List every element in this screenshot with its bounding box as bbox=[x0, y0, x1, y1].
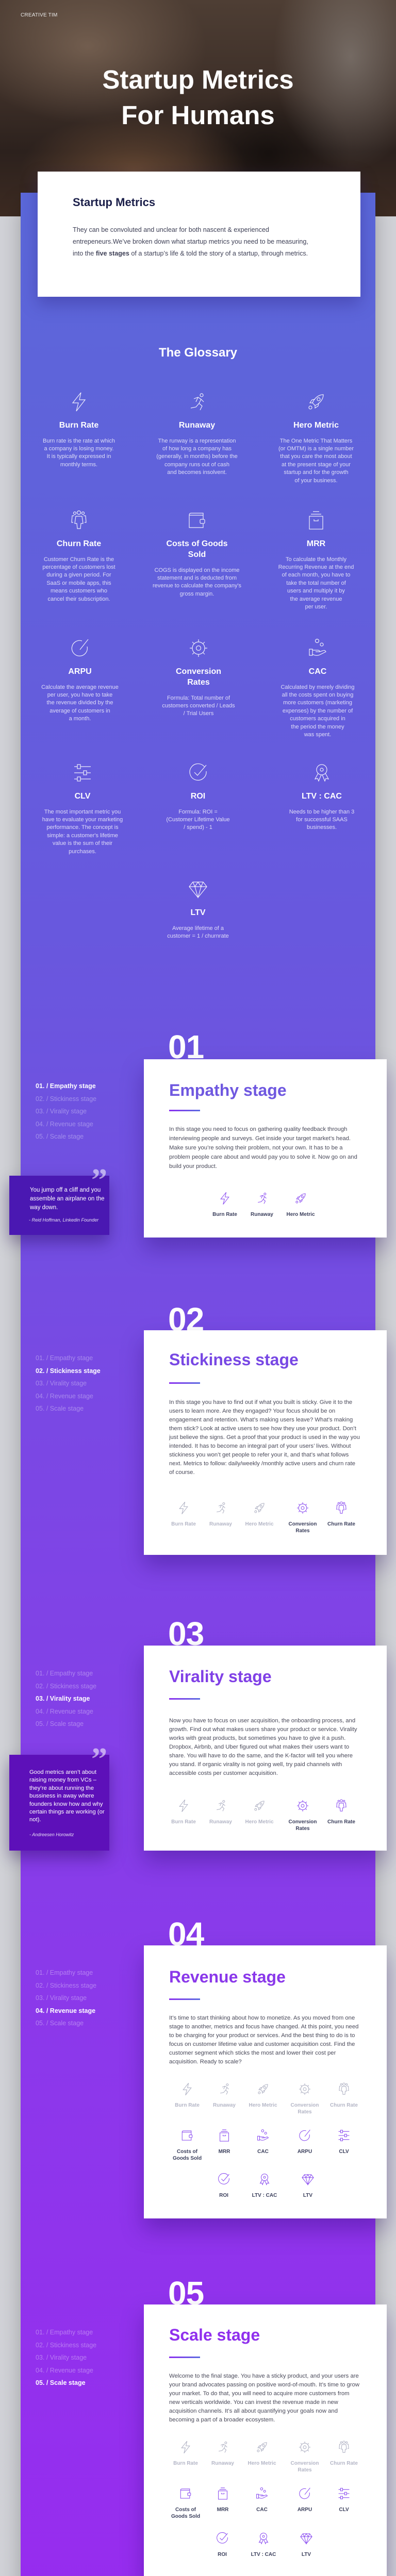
icon: runaway: Runaway bbox=[209, 1819, 232, 1825]
glossary: arpu: ARPU bbox=[68, 667, 92, 676]
nav list stage 4: 03. / Virality stage bbox=[36, 1994, 87, 2002]
glossary: ltv cac: Needs to be higher than 3 bbox=[289, 809, 354, 815]
icon: clv bbox=[323, 2487, 365, 2513]
icon: conversion rates: Conversion bbox=[288, 1521, 317, 1527]
glossary: clv: purchases. bbox=[69, 849, 96, 855]
nav list stage 2: 04. / Revenue stage bbox=[36, 1393, 93, 1400]
nav list stage 4 bbox=[36, 1969, 96, 2027]
card: empathy stage: In this stage you need to focus on gathering quality feedback through interviewing people and surveys. Get inside your target market’s head. Make sure you’re solving their problem, not your own. It has to be a problem people care about and would pay you to solve it. Now go on and build your product. bbox=[169, 1126, 357, 1170]
nav list stage 3: 01. / Empathy stage bbox=[36, 1670, 93, 1677]
glossary: cac bbox=[280, 639, 355, 738]
glossary: cogs: Sold bbox=[188, 550, 206, 558]
quote 2: Good metrics aren’t about raising money from VCs – they’re about running the bussiness in away where founders know how and why certain things are working (or not). bbox=[29, 1769, 105, 1823]
nav list stage 1: 02. / Stickiness stage bbox=[36, 1095, 96, 1103]
icon: cogs bbox=[165, 2487, 206, 2519]
nav list stage 1: 03. / Virality stage bbox=[36, 1108, 87, 1115]
card: empathy stage bbox=[144, 1059, 387, 1238]
icon: conversion rates bbox=[290, 2083, 319, 2114]
icon: roi bbox=[202, 2532, 243, 2557]
glossary: clv: performance. The concept is bbox=[46, 824, 119, 831]
glossary: mrr: MRR bbox=[307, 539, 325, 548]
glossary: ltv cac: LTV : CAC bbox=[302, 791, 342, 801]
icon: cac bbox=[257, 2129, 269, 2155]
glossary: churn rate: during a given period. For bbox=[46, 572, 111, 578]
quote 2 bbox=[9, 1755, 109, 1851]
glossary: ltv cac: businesses. bbox=[307, 824, 337, 831]
icon: conversion rates: Conversion bbox=[290, 2102, 319, 2108]
glossary: roi: (Customer Lifetime Value bbox=[166, 817, 230, 823]
icon: runaway bbox=[251, 1193, 273, 1217]
icon: cac: CAC bbox=[256, 2507, 268, 2512]
nav list stage 3: 05. / Scale stage bbox=[36, 1720, 84, 1727]
icon: churn rate: Churn Rate bbox=[330, 2461, 358, 2466]
glossary: roi: / spend) - 1 bbox=[184, 824, 212, 831]
card: revenue stage: Revenue stage bbox=[169, 1968, 286, 1986]
glossary: churn rate: Customer Churn Rate is the bbox=[44, 556, 114, 563]
stage number 01: 01 bbox=[168, 1028, 204, 1065]
icon: ltv bbox=[287, 2173, 328, 2199]
icon: clv: CLV bbox=[339, 2507, 349, 2512]
glossary: burn rate: a company is losing money. bbox=[44, 446, 113, 452]
glossary: cogs: Costs of Goods bbox=[166, 539, 228, 548]
hero title: Startup Metrics bbox=[102, 65, 294, 94]
glossary: mrr: To calculate the Monthly bbox=[286, 556, 346, 563]
nav list stage 3: 02. / Stickiness stage bbox=[36, 1683, 96, 1690]
glossary: arpu bbox=[41, 639, 119, 722]
intro card bbox=[38, 172, 360, 297]
icon: burn rate bbox=[165, 2441, 206, 2467]
stage number 02: 02 bbox=[168, 1301, 204, 1338]
glossary: churn rate: Churn Rate bbox=[57, 539, 101, 548]
nav list stage 4: 01. / Empathy stage bbox=[36, 1969, 93, 1976]
icon: roi bbox=[203, 2173, 244, 2199]
glossary: cac: the period the money bbox=[291, 724, 344, 730]
nav list stage 5: 05. / Scale stage bbox=[36, 2379, 86, 2386]
nav list stage 3 bbox=[36, 1670, 96, 1727]
nav list stage 2: 01. / Empathy stage bbox=[36, 1354, 93, 1362]
hero background photo bbox=[0, 0, 396, 216]
glossary: burn rate: It is typically expressed in bbox=[47, 453, 111, 460]
glossary: clv: CLV bbox=[75, 791, 90, 801]
nav list stage 5: 02. / Stickiness stage bbox=[36, 2342, 96, 2349]
icon: hero metric bbox=[241, 2441, 283, 2467]
icon: conversion rates: Conversion bbox=[288, 1819, 317, 1825]
icon: churn rate bbox=[327, 1501, 355, 1527]
nav list stage 1: 01. / Empathy stage bbox=[36, 1082, 96, 1090]
quote 1: You jump off a cliff and you assemble an airplane on the way down. bbox=[30, 1187, 104, 1211]
icon: conversion rates bbox=[288, 1502, 317, 1533]
glossary: ltv: LTV bbox=[190, 908, 206, 917]
card: scale stage: Scale stage bbox=[169, 2326, 260, 2344]
glossary: clv: The most important metric you bbox=[44, 809, 121, 815]
nav list stage 4: 02. / Stickiness stage bbox=[36, 1982, 96, 1989]
glossary: cogs: statement and is deducted from bbox=[157, 575, 237, 581]
card: empathy stage: Empathy stage bbox=[169, 1081, 287, 1099]
glossary: arpu: a month. bbox=[69, 716, 91, 722]
icon: hero metric bbox=[286, 1193, 315, 1217]
icon: hero metric: Hero Metric bbox=[286, 1212, 315, 1217]
glossary: hero metric: that you care the most about bbox=[280, 453, 352, 460]
icon: runaway: Runaway bbox=[211, 2461, 234, 2466]
card: revenue stage bbox=[144, 1945, 387, 2218]
icon: hero metric: Hero Metric bbox=[248, 2461, 276, 2466]
card: stickiness stage: In this stage you have to find out if what you built is sticky. Give it to the users to learn more. Are they engaged? Your focus should be on engagement and retention. What’s making users leave? What’s making them stick? Look at active users to see how they use your product. Don’t just believe the signs. Get a proof that your product is used in the way you intended. It has to become an integral part of your users’ lives. Without stickiness you won’t get people to refer your it, and that’s what follows next. Metrics to follow: daily/weekly /monthly active users and churn rate of course. bbox=[169, 1399, 360, 1476]
icon: burn rate bbox=[175, 2083, 200, 2108]
glossary: churn rate: percentage of customers lost bbox=[42, 564, 116, 570]
icon: burn rate: Burn Rate bbox=[173, 2461, 198, 2466]
quote 1: - Reid Hoffman, Linkedin Founder bbox=[29, 1217, 98, 1223]
glossary: cac: Calculated by merely dividing bbox=[280, 684, 355, 690]
icon: runaway: Runaway bbox=[251, 1212, 273, 1217]
icon: clv: CLV bbox=[339, 2148, 349, 2155]
glossary: hero metric: startup and for the growth bbox=[284, 469, 349, 476]
icon: cogs: Costs of bbox=[175, 2507, 196, 2512]
icon: mrr bbox=[219, 2129, 230, 2155]
icon: runaway bbox=[213, 2083, 236, 2108]
icon: runaway bbox=[202, 2441, 243, 2467]
glossary: cac: customers acquired in bbox=[290, 716, 345, 722]
glossary: runaway: (generally, in months) before the bbox=[156, 453, 238, 460]
glossary: mrr: the average revenue bbox=[290, 596, 342, 602]
icon: runaway: Runaway bbox=[209, 1521, 232, 1527]
glossary: roi: ROI bbox=[191, 791, 205, 801]
glossary: mrr: users and multiply it by bbox=[287, 588, 345, 594]
icon: ltv: LTV bbox=[302, 2551, 311, 2557]
quote 1: ” bbox=[91, 1163, 107, 1198]
glossary: conversion rates: Conversion bbox=[176, 667, 221, 676]
glossary: runaway: Runaway bbox=[179, 420, 215, 430]
glossary: clv: value is the sum of their bbox=[53, 840, 112, 846]
card: scale stage: Welcome to the final stage. You have a sticky product, and your users are your brand advocates passing on positive word-of-mouth. It’s time to grow your market. To do that, you will need to acquire more customers from new verticals worldwide. You can invest the revenue made in new acquisition channels. It’s all about quantifying your goals now and becoming a part of a broader ecosystem. bbox=[169, 2373, 359, 2423]
glossary: mrr: of each month, you have to bbox=[282, 572, 350, 578]
card: stickiness stage bbox=[144, 1330, 387, 1555]
nav list stage 5: 01. / Empathy stage bbox=[36, 2329, 93, 2336]
glossary: clv: have to evaluate your marketing bbox=[42, 817, 123, 823]
glossary: runaway: company runs out of cash bbox=[164, 462, 229, 468]
icon: conversion rates bbox=[288, 1800, 317, 1831]
glossary: mrr bbox=[278, 511, 354, 610]
icon: mrr bbox=[202, 2487, 243, 2513]
glossary: runaway: of how long a company has bbox=[162, 446, 232, 452]
nav list stage 5: 03. / Virality stage bbox=[36, 2354, 87, 2361]
stage number 03: 03 bbox=[168, 1615, 204, 1652]
icon: runaway: Runaway bbox=[213, 2102, 236, 2108]
glossary: runaway bbox=[156, 393, 238, 476]
glossary: clv: simple: a customer's lifetime bbox=[47, 833, 118, 839]
icon: hero metric bbox=[245, 1503, 273, 1527]
glossary: cac: all the costs spent on buying bbox=[282, 692, 353, 698]
icon: burn rate bbox=[171, 1800, 196, 1825]
icon: burn rate: Burn Rate bbox=[212, 1212, 237, 1217]
icon: cac: CAC bbox=[257, 2148, 269, 2155]
nav list stage 2: 05. / Scale stage bbox=[36, 1405, 84, 1412]
glossary: hero metric: at the present stage of your bbox=[282, 462, 351, 468]
glossary: cogs: COGS is displayed on the income bbox=[154, 567, 240, 573]
glossary: hero metric: (or OMTM) is a single number bbox=[278, 446, 354, 452]
glossary: churn rate: cancel their subscription. bbox=[47, 596, 110, 602]
icon: mrr: MRR bbox=[217, 2507, 228, 2512]
icon: mrr: MRR bbox=[219, 2148, 230, 2155]
icon: churn rate bbox=[323, 2441, 365, 2467]
glossary: ltv: customer = 1 / churnrate bbox=[167, 933, 229, 939]
hero title: For Humans bbox=[121, 100, 275, 130]
icon: churn rate: Churn Rate bbox=[327, 1521, 355, 1527]
icon: ltv cac: LTV : CAC bbox=[252, 2193, 277, 2198]
nav list stage 5: 04. / Revenue stage bbox=[36, 2367, 93, 2374]
glossary: mrr: Recurring Revenue at the end bbox=[278, 564, 354, 570]
nav list stage 2: 02. / Stickiness stage bbox=[36, 1367, 101, 1375]
nav list stage 1: 04. / Revenue stage bbox=[36, 1121, 93, 1128]
glossary: runaway: The runway is a representation bbox=[158, 438, 236, 444]
glossary: conversion rates bbox=[162, 639, 235, 717]
icon: churn rate bbox=[327, 1799, 355, 1825]
icon: ltv cac bbox=[243, 2532, 284, 2557]
glossary: arpu: Calculate the average revenue bbox=[41, 684, 119, 690]
nav list stage 1: 05. / Scale stage bbox=[36, 1133, 84, 1140]
icon: conversion rates: Rates bbox=[295, 1528, 310, 1533]
icon: arpu bbox=[284, 2487, 325, 2513]
glossary: conversion rates: Rates bbox=[187, 678, 210, 686]
nav list stage 2: 03. / Virality stage bbox=[36, 1380, 87, 1387]
icon: cogs: Goods Sold bbox=[173, 2156, 202, 2161]
quote 2: ” bbox=[91, 1742, 107, 1777]
glossary: arpu: per user, you have to take bbox=[47, 692, 112, 698]
icon: conversion rates: Rates bbox=[295, 1826, 310, 1831]
glossary: hero metric: of your business. bbox=[294, 478, 338, 484]
card: revenue stage: It’s time to start thinking about how to monetize. As you moved from one stage to another, metrics and focus have changed. At this point, you need to be charging for your product or services. And the best thing to do is to focus on customer lifetime value and customer acquisition cost. Find the customer segment which sticks the most and lower their cost per acquisition. Ready to scale? bbox=[169, 2015, 358, 2065]
glossary: burn rate: monthly terms. bbox=[60, 462, 97, 468]
icon: hero metric: Hero Metric bbox=[245, 1819, 273, 1825]
glossary: cac: CAC bbox=[309, 667, 326, 676]
glossary: mrr: take the total number of bbox=[286, 580, 346, 586]
glossary: ltv: Average lifetime of a bbox=[172, 925, 224, 931]
icon: cac bbox=[241, 2487, 283, 2513]
glossary: cogs: gross margin. bbox=[180, 591, 214, 597]
nav list stage 1 bbox=[36, 1082, 96, 1140]
glossary: churn rate bbox=[42, 510, 116, 602]
glossary: hero metric: Hero Metric bbox=[293, 420, 339, 430]
glossary: burn rate: Burn rate is the rate at which bbox=[43, 438, 115, 444]
glossary: cac: was spent. bbox=[304, 732, 331, 738]
glossary: burn rate bbox=[43, 393, 115, 468]
icon: ltv bbox=[286, 2532, 327, 2557]
glossary: conversion rates: / Trial Users bbox=[184, 710, 213, 717]
icon: ltv cac bbox=[244, 2173, 285, 2199]
icon: arpu: ARPU bbox=[298, 2148, 312, 2155]
intro heading: Startup Metrics bbox=[73, 196, 155, 209]
icon: roi: ROI bbox=[218, 2551, 227, 2557]
glossary: cogs bbox=[153, 513, 241, 597]
hero title bbox=[102, 65, 294, 130]
quote 1 bbox=[9, 1176, 109, 1235]
icon: conversion rates bbox=[284, 2441, 325, 2473]
icon: burn rate bbox=[212, 1192, 237, 1217]
icon: burn rate: Burn Rate bbox=[175, 2102, 200, 2108]
icon: roi: ROI bbox=[219, 2193, 228, 2198]
icon: churn rate bbox=[330, 2082, 358, 2108]
icon: runaway bbox=[209, 1800, 232, 1825]
icon: ltv cac: LTV : CAC bbox=[251, 2551, 276, 2557]
card: virality stage: Now you have to focus on user acquisition, the onboarding process, and growth. Find out what makes users share your product or service. Virality works with great products, but sometimes you have to give it a push. Dropbox, Airbnb, and Uber figured out what makes their users want to share. You will have to do the same, and the K-factor will tell you where you stand. If organic virality is not going well, try paid channels with accessible costs per customer acquisition. bbox=[169, 1718, 357, 1776]
glossary: hero metric bbox=[278, 394, 354, 484]
nav list stage 3: 04. / Revenue stage bbox=[36, 1708, 93, 1715]
glossary: burn rate: Burn Rate bbox=[59, 420, 98, 430]
icon: arpu bbox=[284, 2129, 325, 2155]
icon: conversion rates: Rates bbox=[298, 2467, 312, 2473]
brand label: CREATIVE TIM bbox=[21, 12, 57, 18]
quote 2: - Andreesen Horowitz bbox=[29, 1832, 74, 1837]
icon: burn rate: Burn Rate bbox=[171, 1819, 196, 1825]
glossary: churn rate: means customers who bbox=[51, 588, 107, 594]
glossary: arpu: average of customers in bbox=[50, 708, 110, 714]
glossary: cac: expenses) by the number of bbox=[283, 708, 353, 714]
icon: hero metric bbox=[249, 2084, 277, 2108]
nav list stage 4: 04. / Revenue stage bbox=[36, 2007, 95, 2014]
glossary: churn rate: SaaS or mobile apps, this bbox=[46, 580, 111, 586]
glossary: ltv cac bbox=[289, 764, 354, 831]
icon: burn rate bbox=[171, 1502, 196, 1527]
glossary: ltv bbox=[167, 882, 229, 939]
icon: cogs: Goods Sold bbox=[171, 2513, 200, 2519]
glossary: hero metric: The One Metric That Matters bbox=[280, 438, 352, 444]
icon: churn rate: Churn Rate bbox=[327, 1819, 355, 1825]
intro text: They can be convoluted and unclear for both nascent & experienced entrepeneurs.We’ve broken down what startup metrics you need to be measuring, into the five stages of a startup’s life & told the story of a startup, through metrics. bbox=[73, 226, 308, 257]
icon: hero metric bbox=[245, 1801, 273, 1825]
icon: conversion rates: Rates bbox=[298, 2109, 312, 2114]
glossary: ltv cac: for successful SAAS bbox=[296, 817, 348, 823]
stage number 05: 05 bbox=[168, 2275, 204, 2312]
icon: clv bbox=[323, 2129, 365, 2155]
glossary: cac: more customers (marketing bbox=[283, 700, 352, 706]
card: stickiness stage: Stickiness stage bbox=[169, 1350, 299, 1369]
glossary: roi: Formula: ROI = bbox=[178, 809, 218, 815]
icon: cogs bbox=[173, 2130, 202, 2161]
glossary: conversion rates: customers converted / Leads bbox=[162, 703, 235, 709]
glossary: mrr: per user. bbox=[305, 604, 327, 610]
icon: hero metric: Hero Metric bbox=[249, 2102, 277, 2108]
icon: runaway bbox=[209, 1502, 232, 1527]
icon: churn rate: Churn Rate bbox=[330, 2102, 358, 2108]
glossary: arpu: the revenue divided by the bbox=[46, 700, 113, 706]
card: virality stage bbox=[144, 1646, 387, 1851]
card: virality stage: Virality stage bbox=[169, 1667, 272, 1686]
glossary: roi bbox=[166, 764, 230, 831]
nav list stage 5 bbox=[36, 2326, 96, 2389]
glossary: runaway: and becomes insolvent. bbox=[167, 469, 227, 476]
card: scale stage bbox=[144, 2304, 387, 2576]
glossary: cogs: revenue to calculate the company's bbox=[153, 583, 241, 589]
icon: arpu: ARPU bbox=[298, 2507, 312, 2512]
icon: burn rate: Burn Rate bbox=[171, 1521, 196, 1527]
glossary: conversion rates: Formula: Total number of bbox=[167, 694, 230, 701]
nav list stage 4: 05. / Scale stage bbox=[36, 2020, 84, 2027]
stage number 04: 04 bbox=[168, 1916, 204, 1953]
nav list stage 3: 03. / Virality stage bbox=[36, 1695, 90, 1702]
glossary: clv bbox=[42, 764, 123, 855]
nav list stage 2 bbox=[36, 1354, 101, 1412]
icon: conversion rates: Conversion bbox=[290, 2461, 319, 2466]
icon: cogs: Costs of bbox=[177, 2148, 197, 2155]
icon: hero metric: Hero Metric bbox=[245, 1521, 273, 1527]
icon: ltv: LTV bbox=[303, 2193, 312, 2198]
glossary heading: The Glossary bbox=[159, 346, 237, 360]
